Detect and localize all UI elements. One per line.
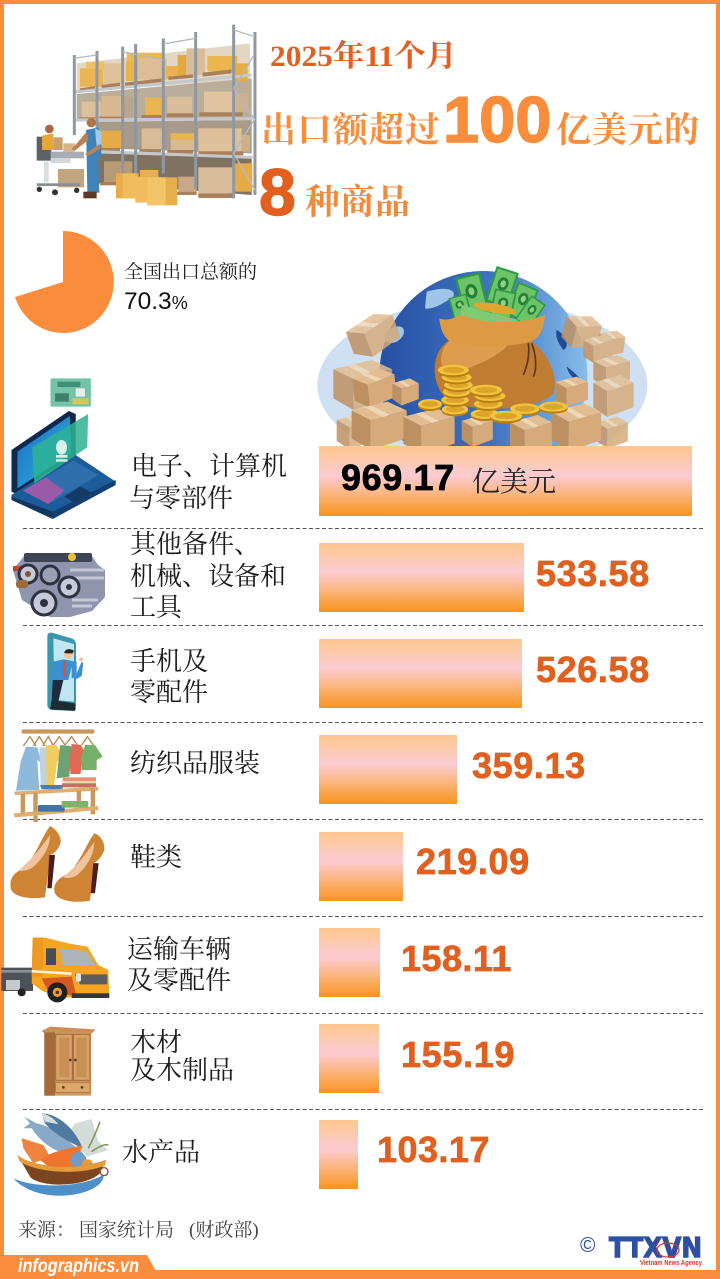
footer tab: infographics.vn: infographics.vn xyxy=(18,1256,139,1277)
money bag xyxy=(435,315,555,409)
rack frames xyxy=(74,25,255,198)
row 7: wood xyxy=(42,1024,515,1096)
bar xyxy=(319,832,403,901)
label: 鞋类 xyxy=(130,843,182,872)
logo: TTXVN xyxy=(580,1231,702,1267)
value: 103.17 xyxy=(377,1129,490,1170)
title xyxy=(259,40,700,229)
title big number 100: 100 xyxy=(443,83,551,156)
icon: fish basket xyxy=(13,1113,108,1196)
value: 155.19 xyxy=(401,1034,515,1075)
icon: laptop and circuit board xyxy=(11,378,116,519)
back boxes xyxy=(333,308,634,449)
standing worker in blue xyxy=(72,118,102,198)
pie caption: 70.3% xyxy=(124,288,188,315)
unit: 亿美元 xyxy=(472,466,556,498)
label: 水产品 xyxy=(122,1138,200,1167)
bar xyxy=(319,543,524,612)
title big number 8: 8 xyxy=(259,155,296,229)
label: 机械、设备和 xyxy=(130,562,286,591)
row 6: transport vehicles xyxy=(1,928,512,1002)
value: 969.17 xyxy=(341,457,455,498)
bills xyxy=(448,266,546,329)
value: 158.11 xyxy=(401,938,512,979)
label: 手机及 xyxy=(130,647,208,676)
value: 533.58 xyxy=(536,553,650,594)
row 8: seafood xyxy=(13,1113,490,1196)
label: 工具 xyxy=(130,593,183,622)
bar xyxy=(319,639,522,708)
bar xyxy=(319,735,457,804)
front stack of yellow boxes xyxy=(116,170,177,205)
icon: phone with man xyxy=(47,633,83,711)
bar xyxy=(319,446,692,516)
dashed row dividers xyxy=(23,528,703,1110)
pie caption xyxy=(124,261,257,315)
value: 526.58 xyxy=(536,649,650,690)
shelf beams xyxy=(75,75,253,157)
globe xyxy=(379,271,587,479)
bar xyxy=(319,1024,379,1093)
illustration: globe, money bag and boxes xyxy=(317,266,648,446)
logo: TTXVN: © xyxy=(580,1234,596,1257)
coins xyxy=(418,365,568,423)
front boxes xyxy=(352,367,601,455)
icon: orange truck xyxy=(1,938,109,1002)
pallets xyxy=(79,69,243,198)
title line 2 unit: 亿美元的 xyxy=(556,111,700,150)
source note: 国家统计局 xyxy=(79,1219,174,1241)
label: 木材 xyxy=(130,1028,182,1057)
label: 及零配件 xyxy=(127,966,231,995)
source note: (财政部) xyxy=(189,1219,259,1241)
bar xyxy=(319,1120,358,1189)
row 3: phones xyxy=(47,633,650,711)
label: 与零部件 xyxy=(129,484,233,513)
value: 359.13 xyxy=(472,745,586,786)
source note: 来源： xyxy=(18,1219,75,1241)
cart and monitor xyxy=(37,137,84,195)
stored boxes xyxy=(80,48,252,193)
pie caption: 全国出口总额的 xyxy=(124,261,257,283)
row 1: electronics xyxy=(11,378,692,519)
label: 其他备件、 xyxy=(130,530,260,559)
icon: high heels xyxy=(10,826,104,902)
seated worker xyxy=(42,125,54,150)
halo xyxy=(317,300,647,470)
label: 运输车辆 xyxy=(127,935,231,964)
value: 219.09 xyxy=(416,841,530,882)
row 5: footwear xyxy=(10,826,530,902)
icon: clothes rack xyxy=(13,729,103,822)
logo: TTXVN: Vietnam News Agency xyxy=(640,1260,702,1267)
title line 2 label: 出口额超过 xyxy=(261,111,441,150)
title line 1: 2025年11个月 xyxy=(270,40,457,73)
label: 纺织品服装 xyxy=(130,749,260,778)
logo: TTXVN: TTXVN xyxy=(609,1231,702,1264)
icon: wardrobe xyxy=(42,1027,96,1096)
label: 电子、计算机 xyxy=(131,452,287,481)
title line 3: 种商品 xyxy=(305,183,410,222)
pie chart: 70.3% xyxy=(15,231,114,333)
bar xyxy=(319,928,380,997)
row 4: textiles xyxy=(13,729,586,822)
label: 零配件 xyxy=(130,678,208,707)
shaded rack interior xyxy=(77,43,252,195)
label: 及木制品 xyxy=(130,1056,234,1085)
row 2: machinery xyxy=(13,530,650,622)
icon: engine xyxy=(13,553,105,617)
illustration: warehouse racks with workers xyxy=(37,25,255,205)
